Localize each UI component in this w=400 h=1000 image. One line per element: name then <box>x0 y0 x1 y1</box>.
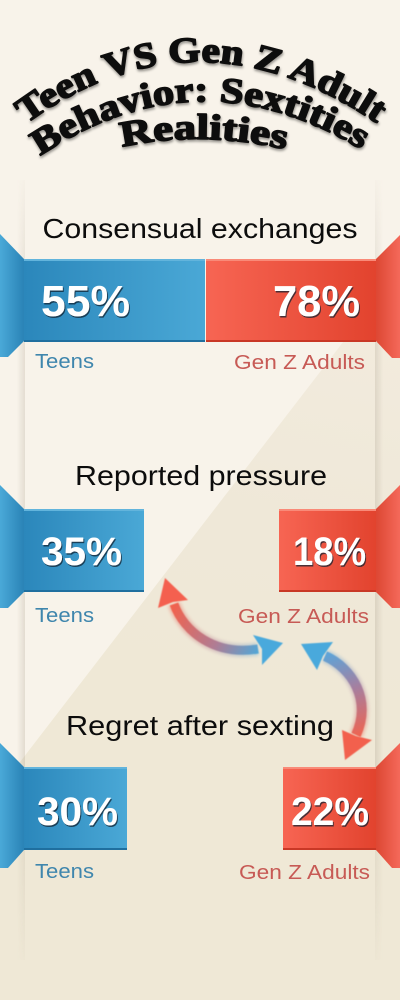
left ribbon tab <box>0 743 24 868</box>
title: Teen VS Gen Z Adult <box>12 38 388 127</box>
label: gen z adults: Gen Z Adults <box>239 862 370 884</box>
section 1: consensual exchanges <box>0 213 400 374</box>
label: teens: Teens <box>35 605 94 627</box>
section 3: regret after sexting <box>0 710 400 884</box>
bar: teens 35% <box>24 509 144 592</box>
background <box>0 212 400 1000</box>
bar: gen z adults 78%: 78% <box>273 277 360 326</box>
arrow: pressure to regret link <box>301 642 372 760</box>
heading: regret after sexting: Regret after sexting <box>66 710 334 741</box>
bar: gen z adults 18%: 18% <box>293 530 366 574</box>
left ribbon tab <box>0 485 24 608</box>
bar: teens 35%: 35% <box>41 530 122 574</box>
bar: gen z adults 22%: 22% <box>291 790 369 834</box>
title: Realities <box>117 113 290 152</box>
bar: teens 55% <box>24 259 205 342</box>
bar: gen z adults 22% <box>283 767 376 850</box>
title: Behavior: Sextities <box>26 78 370 160</box>
section 2: reported pressure <box>0 460 400 628</box>
right ribbon tab <box>376 743 400 868</box>
heading: consensual exchanges: Consensual exchanges <box>42 213 357 244</box>
left ribbon tab <box>0 234 24 357</box>
heading: reported pressure: Reported pressure <box>75 460 327 491</box>
bar: teens 30% <box>24 767 127 850</box>
bar: gen z adults 18% <box>279 509 376 592</box>
label: teens: Teens <box>35 351 94 373</box>
bar: teens 55%: 55% <box>41 277 130 326</box>
bar: gen z adults 78% <box>206 259 376 342</box>
label: gen z adults: Gen Z Adults <box>238 606 369 628</box>
arrow: teens and adults pressure link <box>158 578 283 665</box>
label: gen z adults: Gen Z Adults <box>234 352 365 374</box>
right ribbon tab <box>376 485 400 608</box>
bar: teens 30%: 30% <box>37 790 118 834</box>
label: teens: Teens <box>35 861 94 883</box>
right ribbon tab <box>376 235 400 358</box>
